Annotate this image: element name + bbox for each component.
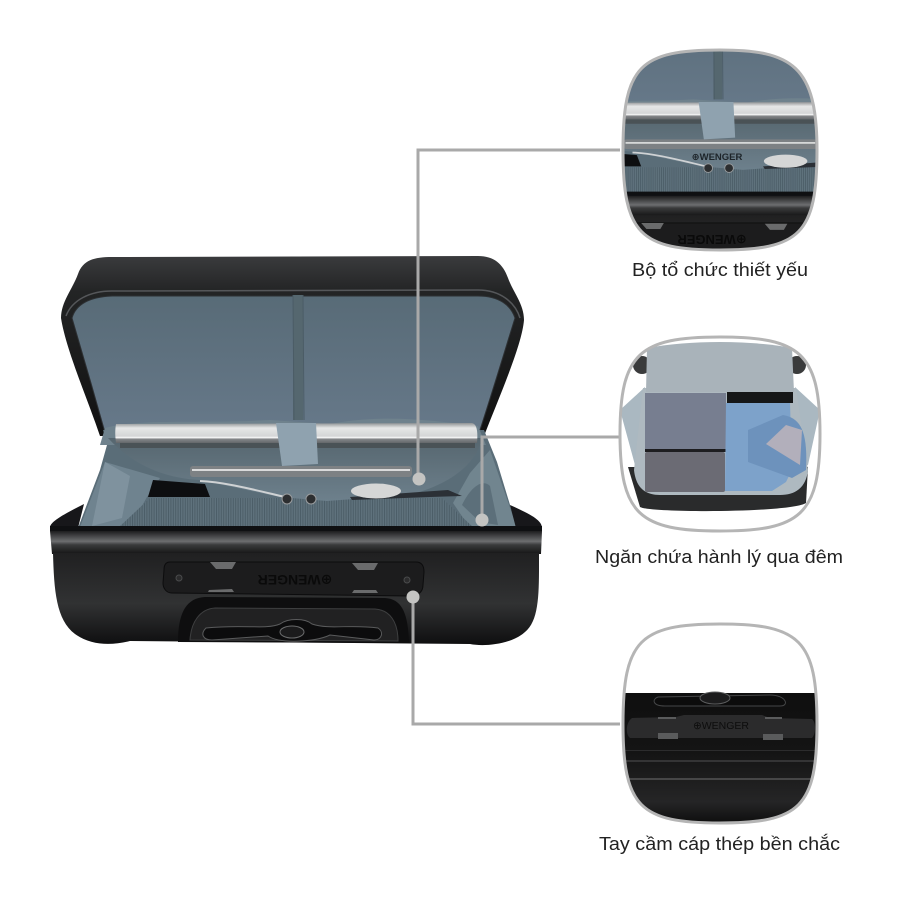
lid hinges [633,356,647,374]
lid inner lining [72,296,515,436]
handle frame [623,624,817,823]
handle caption: Tay cầm cáp thép bền chắc [599,833,840,854]
compartment caption: Ngăn chứa hành lý qua đêm [595,547,843,567]
shirt collar [748,415,806,478]
rails [620,750,820,751]
leader line: organiser [412,150,620,486]
handle plate [163,562,424,596]
suitcase base [628,467,808,511]
organiser caption: Bộ tổ chức thiết yếu [632,260,808,280]
suitcase lid shell [61,256,524,436]
front body [53,553,539,645]
side panel left [80,462,160,527]
logo on main plate: ⊕WENGER [258,572,332,588]
panel: organiser detail [622,48,818,252]
dark line between stacks [645,449,726,452]
laptop [115,423,477,443]
organiser pocket [108,438,482,501]
strap [276,423,318,466]
panel: handle detail: ⊕WENGER [693,720,749,732]
side wings [622,387,645,464]
zipper [50,526,542,531]
handle recess [178,597,409,643]
cable and zipper pulls [200,481,285,497]
dark folded shirt [645,452,725,492]
panel: overnight compartment detail [620,337,820,531]
leader line: overnight compartment [476,437,620,526]
plate rivets [176,575,182,581]
dark interior shadows [148,480,210,497]
tray frame [634,388,808,495]
organiser zoomed image [624,52,816,248]
side panel right [453,450,517,528]
plate slots [658,717,783,740]
flap [646,342,794,392]
organiser pocket upper edge [100,419,486,445]
lid centre seam [293,295,303,420]
lower interior base [78,430,517,528]
blue shirt [725,403,792,491]
plate slots [208,562,378,593]
handle case body [620,693,820,826]
front upper band [50,531,542,554]
compartment frame [620,337,820,531]
organiser zoomed image: ⊕WENGER [677,232,747,247]
organiser frame [623,50,817,250]
panel: handle detail [620,624,820,826]
infographic canvas [50,48,842,854]
lid zipper line [66,290,520,318]
handle grip [654,695,785,706]
handle plate [627,715,815,738]
main suitcase photo illustration [50,256,542,645]
organiser zoomed image: ⊕WENGER [692,152,742,163]
leader line: handle [406,590,620,724]
sweater [645,393,726,449]
suitcase front rim [50,504,542,528]
white accessory [351,484,401,498]
tablet in pocket [190,466,412,477]
mesh floor [118,498,474,528]
handle grip [203,620,381,641]
